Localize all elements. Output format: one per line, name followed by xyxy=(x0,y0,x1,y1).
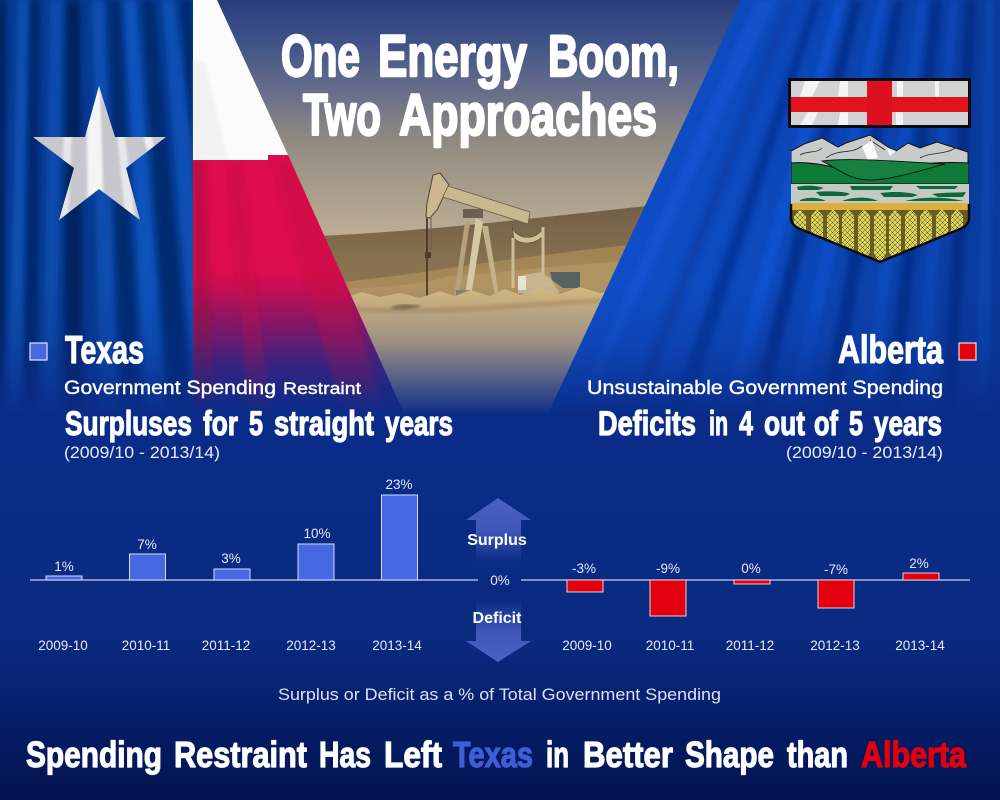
title: Approaches xyxy=(399,83,657,148)
label: deficit: Deficit xyxy=(473,610,522,627)
bottom headline: than xyxy=(787,734,848,775)
bottom headline xyxy=(26,734,967,775)
bar chart: Texas: 3% xyxy=(221,551,241,566)
right curtain xyxy=(545,0,1000,420)
bar chart: Texas: 1% xyxy=(54,559,74,574)
bar chart: Alberta: -7% xyxy=(824,562,848,577)
panel: Texas heading: straight xyxy=(274,405,374,443)
chart caption: Surplus or Deficit as a % of Total Government Spending xyxy=(278,685,721,704)
title: One xyxy=(281,24,360,89)
axis lines and zero label: 0% xyxy=(490,573,510,588)
panel: Alberta heading: out xyxy=(764,405,805,443)
bar chart: Alberta: 2009-10 xyxy=(562,638,612,653)
bar chart: Alberta: -3% xyxy=(572,561,596,576)
panel: Texas heading xyxy=(30,329,453,462)
oil pump jack xyxy=(425,173,580,298)
title xyxy=(281,24,679,148)
panel: Alberta heading: in xyxy=(709,405,728,443)
panel: Texas heading: Restraint xyxy=(283,380,361,398)
bar chart: Alberta: 2011-12 xyxy=(726,638,774,653)
bar chart: Alberta: 2013-14 xyxy=(895,638,945,653)
bottom headline: Spending xyxy=(26,734,162,775)
panel: Alberta heading: 4 xyxy=(739,405,753,443)
panel: Texas heading: Texas xyxy=(65,329,144,372)
hills xyxy=(791,162,969,184)
bottom headline: Has xyxy=(319,734,371,775)
photo: oil pump in field xyxy=(215,0,745,420)
bottom headline: Texas xyxy=(453,734,533,775)
title: Boom, xyxy=(548,24,679,89)
panel: Texas heading: 5 xyxy=(249,405,263,443)
panel: Alberta heading: Unsustainable Government Spending xyxy=(587,377,943,399)
bar chart: Alberta xyxy=(562,556,945,653)
panel: Texas heading: (2009/10 - 2013/14) xyxy=(64,443,220,462)
panel: Alberta heading: Alberta xyxy=(838,329,943,372)
bottom headline: Restraint xyxy=(174,734,307,775)
title: Energy xyxy=(378,24,527,89)
mountains xyxy=(791,134,968,166)
bottom headline: Alberta xyxy=(861,734,967,775)
bar chart: Texas: 2012-13 xyxy=(286,638,336,653)
bottom headline: Shape xyxy=(685,734,774,775)
panel: Alberta heading: 5 xyxy=(849,405,863,443)
title: Two xyxy=(303,83,381,148)
bottom headline: Better xyxy=(583,734,673,775)
label: surplus: Surplus xyxy=(467,532,527,549)
shield: Alberta coat of arms xyxy=(788,78,971,264)
bar chart: Texas: 2009-10 xyxy=(38,638,88,653)
bottom headline: in xyxy=(546,734,569,775)
arrow: surplus up xyxy=(466,498,531,562)
panel: Alberta heading: (2009/10 - 2013/14) xyxy=(786,443,943,462)
panel: Texas heading: years xyxy=(385,405,453,443)
panel: Alberta heading: Deficits xyxy=(598,405,696,443)
bar chart: Alberta: 2% xyxy=(909,556,929,571)
panel: Texas heading: Surpluses xyxy=(65,405,192,443)
bar chart: Alberta: 2012-13 xyxy=(810,638,860,653)
bar chart: Alberta: 2010-11 xyxy=(646,638,694,653)
left curtain: Texas flag xyxy=(0,0,407,420)
bar chart: Texas: 2011-12 xyxy=(202,638,250,653)
wheat field xyxy=(792,210,968,260)
bar chart: Texas: 7% xyxy=(137,537,157,552)
panel: Texas heading: Government Spending xyxy=(64,377,276,399)
bottom headline: Left xyxy=(384,734,442,775)
bar chart: Texas: 2013-14 xyxy=(372,638,422,653)
bar chart: Alberta: -9% xyxy=(656,561,680,576)
panel: Alberta heading: years xyxy=(874,405,942,443)
bar chart: Texas: 10% xyxy=(303,526,331,541)
panel: Alberta heading: of xyxy=(814,405,839,443)
centre and curtain fade into background xyxy=(0,285,1000,430)
bar chart: Texas: 2010-11 xyxy=(122,638,170,653)
panel: Alberta heading xyxy=(587,329,976,462)
river and trees xyxy=(791,184,969,203)
panel: Texas heading: for xyxy=(203,405,238,443)
star xyxy=(30,84,170,224)
bar chart: Alberta: 0% xyxy=(741,561,761,576)
bar chart: Texas xyxy=(38,477,422,653)
arrow: deficit down xyxy=(466,600,531,662)
bar chart: Texas: 23% xyxy=(385,477,413,492)
